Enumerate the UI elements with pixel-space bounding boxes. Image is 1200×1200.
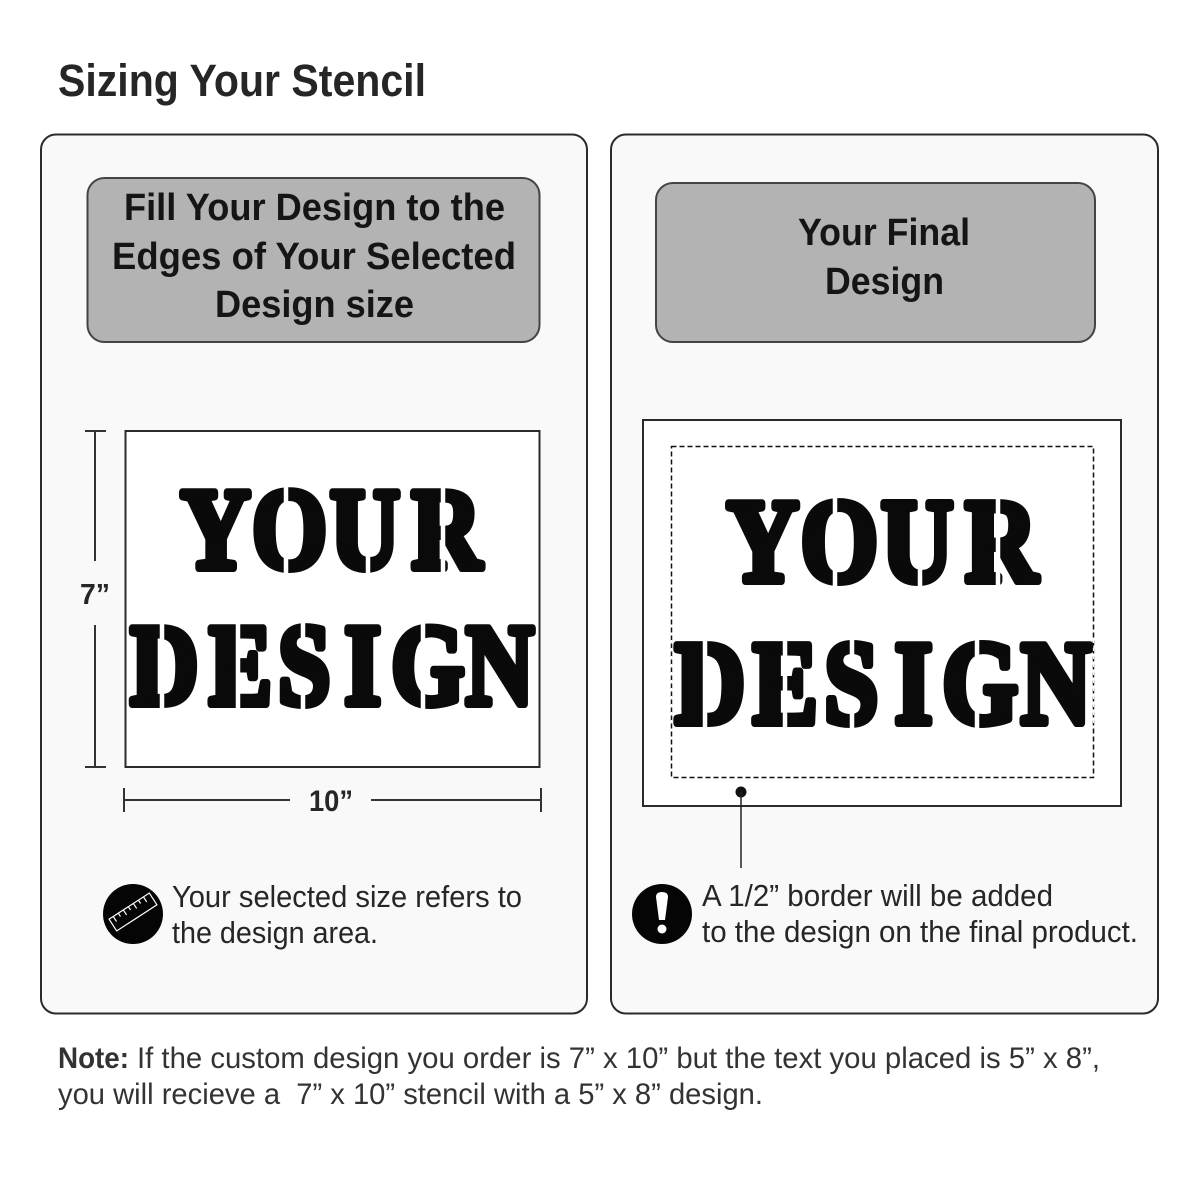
- panel: final design: [611, 134, 1158, 1014]
- panel: fill your design: [41, 134, 587, 1014]
- dimension: 7 inch height: [80, 431, 110, 767]
- stencil with border: [643, 420, 1121, 806]
- stencil design area: [126, 431, 540, 767]
- note: selected size: the design area.: [172, 915, 378, 950]
- title: Sizing Your Stencil: [58, 55, 426, 106]
- stencil with border: DESIGN: [675, 617, 1091, 749]
- heading box: fill your design: Fill Your Design to the: [124, 187, 505, 229]
- stencil design area: YOUR: [181, 465, 483, 593]
- note: selected size: Your selected size refers to: [172, 879, 522, 914]
- heading box: fill your design: [88, 178, 540, 342]
- footer note: you will recieve a 7” x 10” stencil with a 5” x 8” design.: [58, 1078, 763, 1111]
- icon: ruler: [103, 884, 163, 944]
- dimension: 7 inch height: 7”: [80, 579, 110, 611]
- stencil with border: YOUR: [727, 475, 1039, 607]
- dimension: 10 inch width: [124, 785, 541, 818]
- note: border added: to the design on the final product.: [702, 914, 1138, 949]
- note: selected size: [172, 879, 522, 950]
- callout line: [736, 786, 746, 868]
- icon: exclamation: [632, 884, 692, 944]
- heading box: final design: [656, 183, 1095, 342]
- heading box: final design: Your Final: [798, 212, 970, 254]
- dimension: 10 inch width: 10”: [309, 785, 353, 818]
- footer note: [58, 1042, 1100, 1111]
- heading box: fill your design: Edges of Your Selected: [112, 236, 516, 278]
- note: border added: [702, 878, 1138, 949]
- footer note: If the custom design you order is 7” x 10” but the text you placed is 5” x 8”,: [137, 1042, 1100, 1075]
- footer note: Note:: [58, 1042, 129, 1075]
- heading box: final design: Design: [825, 261, 944, 303]
- note: border added: A 1/2” border will be added: [702, 878, 1053, 913]
- heading box: fill your design: Design size: [215, 284, 414, 326]
- stencil design area: DESIGN: [130, 601, 534, 729]
